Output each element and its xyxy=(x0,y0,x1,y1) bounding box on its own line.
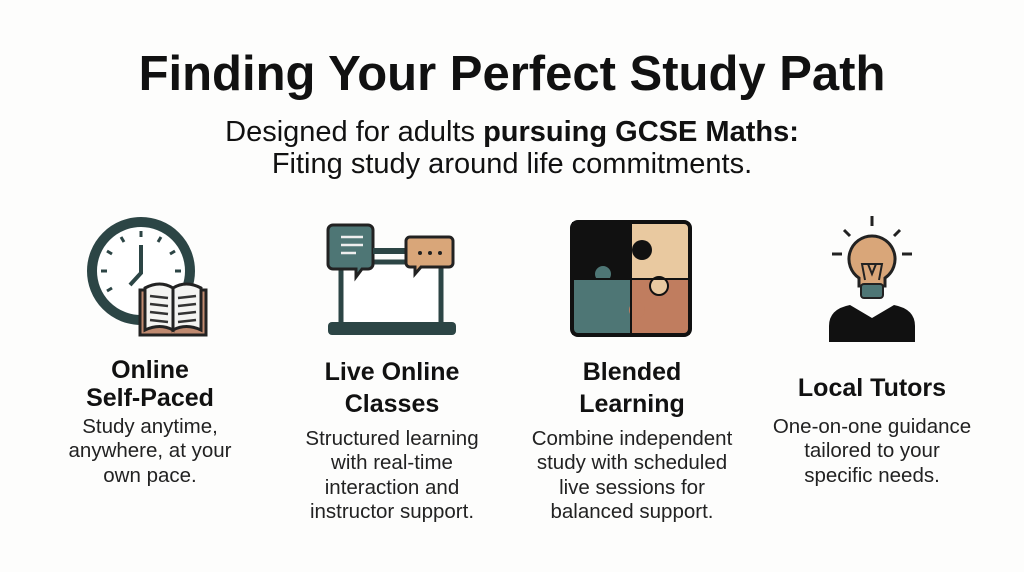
card 2 text: Structured learning xyxy=(305,427,479,450)
card 1 heading xyxy=(86,356,214,412)
card 3 heading: Learning xyxy=(579,390,685,418)
card 3 text: live sessions for xyxy=(559,476,705,499)
icon: laptop with chat bubbles xyxy=(326,224,456,335)
title: Finding Your Perfect Study Path xyxy=(139,47,885,101)
card 3 text: Combine independent xyxy=(532,427,732,450)
card 3 text: balanced support. xyxy=(550,500,713,523)
card 4 text: One-on-one guidance xyxy=(773,415,971,438)
card 3 heading: Blended xyxy=(583,358,681,386)
card 2 heading xyxy=(325,358,459,418)
icon: clock and book xyxy=(87,217,208,336)
card 1 text: anywhere, at your xyxy=(69,439,231,462)
card 2 text: interaction and xyxy=(325,476,459,499)
card 1 heading: Self-Paced xyxy=(86,384,214,412)
subtitle: Designed for adults pursuing GCSE Maths: xyxy=(225,116,799,148)
card 1 text xyxy=(69,415,232,487)
card 2 text xyxy=(305,427,479,523)
card 1 text: own pace. xyxy=(103,464,197,487)
card 2 heading: Live Online xyxy=(325,358,459,386)
card 3 heading xyxy=(579,358,685,418)
card 4 text xyxy=(773,415,971,487)
icon: puzzle xyxy=(570,220,692,337)
card 4 heading: Local Tutors xyxy=(798,374,946,402)
icon: lightbulb head xyxy=(829,216,915,342)
subtitle: Fiting study around life commitments. xyxy=(272,148,752,180)
card 2 heading: Classes xyxy=(345,390,439,418)
card 2 text: instructor support. xyxy=(310,500,474,523)
card 3 text xyxy=(532,427,732,523)
card 2 text: with real-time xyxy=(331,451,453,474)
card 4 text: specific needs. xyxy=(804,464,940,487)
card 1 heading: Online xyxy=(111,356,189,384)
card 3 text: study with scheduled xyxy=(537,451,727,474)
card 4 text: tailored to your xyxy=(804,439,940,462)
card 1 text: Study anytime, xyxy=(82,415,218,438)
subtitle xyxy=(225,116,799,180)
